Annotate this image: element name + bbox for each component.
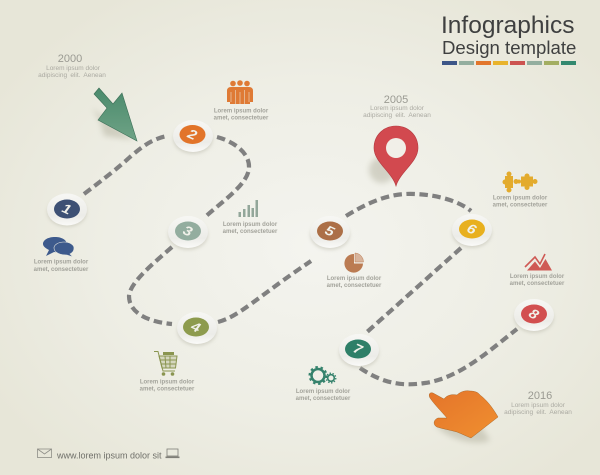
dashed route xyxy=(84,136,517,384)
icon: laptop xyxy=(166,449,180,458)
node 5: 5 xyxy=(321,224,338,240)
icon: red map pin xyxy=(369,126,418,186)
title: Infographics xyxy=(441,12,574,39)
year label 2005: adipiscing elit. Aenean xyxy=(363,112,431,119)
caption: node 1 xyxy=(34,260,89,273)
caption: node 2 xyxy=(214,108,269,122)
node 1: 1 xyxy=(58,202,75,218)
node 2 xyxy=(173,120,213,154)
icon: bar chart xyxy=(238,200,258,217)
node 3: 3 xyxy=(179,224,196,240)
caption: node 3 xyxy=(223,222,278,235)
node 7: 7 xyxy=(349,342,366,358)
title: Design template xyxy=(442,37,576,58)
year label 2016: 2016 xyxy=(528,390,552,402)
caption: node 6: amet, consectetuer xyxy=(493,202,548,208)
caption: node 5 xyxy=(327,276,382,289)
caption: node 7 xyxy=(296,389,351,402)
year label 2000: 2000 xyxy=(58,53,82,65)
caption: node 7: Lorem ipsum dolor xyxy=(296,389,351,395)
node 4 xyxy=(177,312,217,346)
year label 2016: adipiscing elit. Aenean xyxy=(504,409,572,416)
caption: node 8: amet, consectetuer xyxy=(510,281,565,287)
icon: shopping cart xyxy=(154,352,177,375)
caption: node 4: amet, consectetuer xyxy=(140,386,195,392)
year label 2000 xyxy=(38,53,106,79)
caption: node 2: Lorem ipsum dolor xyxy=(214,108,269,114)
node 4: 4 xyxy=(187,320,204,336)
year label 2016 xyxy=(504,390,572,416)
node 3 xyxy=(168,216,208,250)
icon: envelope xyxy=(38,449,52,458)
node 8 xyxy=(514,299,554,333)
caption: node 6 xyxy=(493,196,548,208)
caption: node 5: amet, consectetuer xyxy=(327,283,382,289)
node 6 xyxy=(452,214,492,248)
year label 2000: Lorem ipsum dolor xyxy=(46,65,101,72)
caption: node 5: Lorem ipsum dolor xyxy=(327,276,382,282)
caption: node 6: Lorem ipsum dolor xyxy=(493,196,548,202)
caption: node 1: Lorem ipsum dolor xyxy=(34,260,89,266)
icon: green arrow xyxy=(92,88,137,141)
title xyxy=(441,12,576,58)
year label 2000: adipiscing elit. Aenean xyxy=(38,72,106,79)
node 6: 6 xyxy=(463,222,480,238)
node 8: 8 xyxy=(524,307,542,322)
icon: red area chart xyxy=(525,254,552,270)
caption: node 8 xyxy=(510,274,565,287)
website text: www.lorem ipsum dolor sit xyxy=(56,450,162,460)
year label 2005: 2005 xyxy=(384,94,408,106)
icon: puzzle pieces xyxy=(502,172,538,192)
node 7 xyxy=(339,334,379,368)
title colour bar xyxy=(442,61,576,65)
caption: node 2: amet, consectetuer xyxy=(214,116,269,122)
icon: pie chart xyxy=(344,253,364,273)
caption: node 4: Lorem ipsum dolor xyxy=(140,380,195,386)
node 5 xyxy=(310,216,350,250)
caption: node 8: Lorem ipsum dolor xyxy=(510,274,565,280)
icon: orange pointing hand xyxy=(429,391,498,443)
caption: node 1: amet, consectetuer xyxy=(34,267,89,273)
caption: node 3: Lorem ipsum dolor xyxy=(223,222,278,228)
caption: node 4 xyxy=(140,380,195,392)
caption: node 7: amet, consectetuer xyxy=(296,396,351,402)
year label 2005: Lorem ipsum dolor xyxy=(370,105,425,112)
year label 2016: Lorem ipsum dolor xyxy=(511,402,566,409)
icon: speech bubbles xyxy=(43,237,74,257)
icon: people group xyxy=(227,80,253,104)
node 1 xyxy=(47,194,87,227)
caption: node 3: amet, consectetuer xyxy=(223,229,278,235)
icon: gears xyxy=(310,367,336,384)
node 2: 2 xyxy=(184,127,200,143)
year label 2005 xyxy=(363,94,431,119)
